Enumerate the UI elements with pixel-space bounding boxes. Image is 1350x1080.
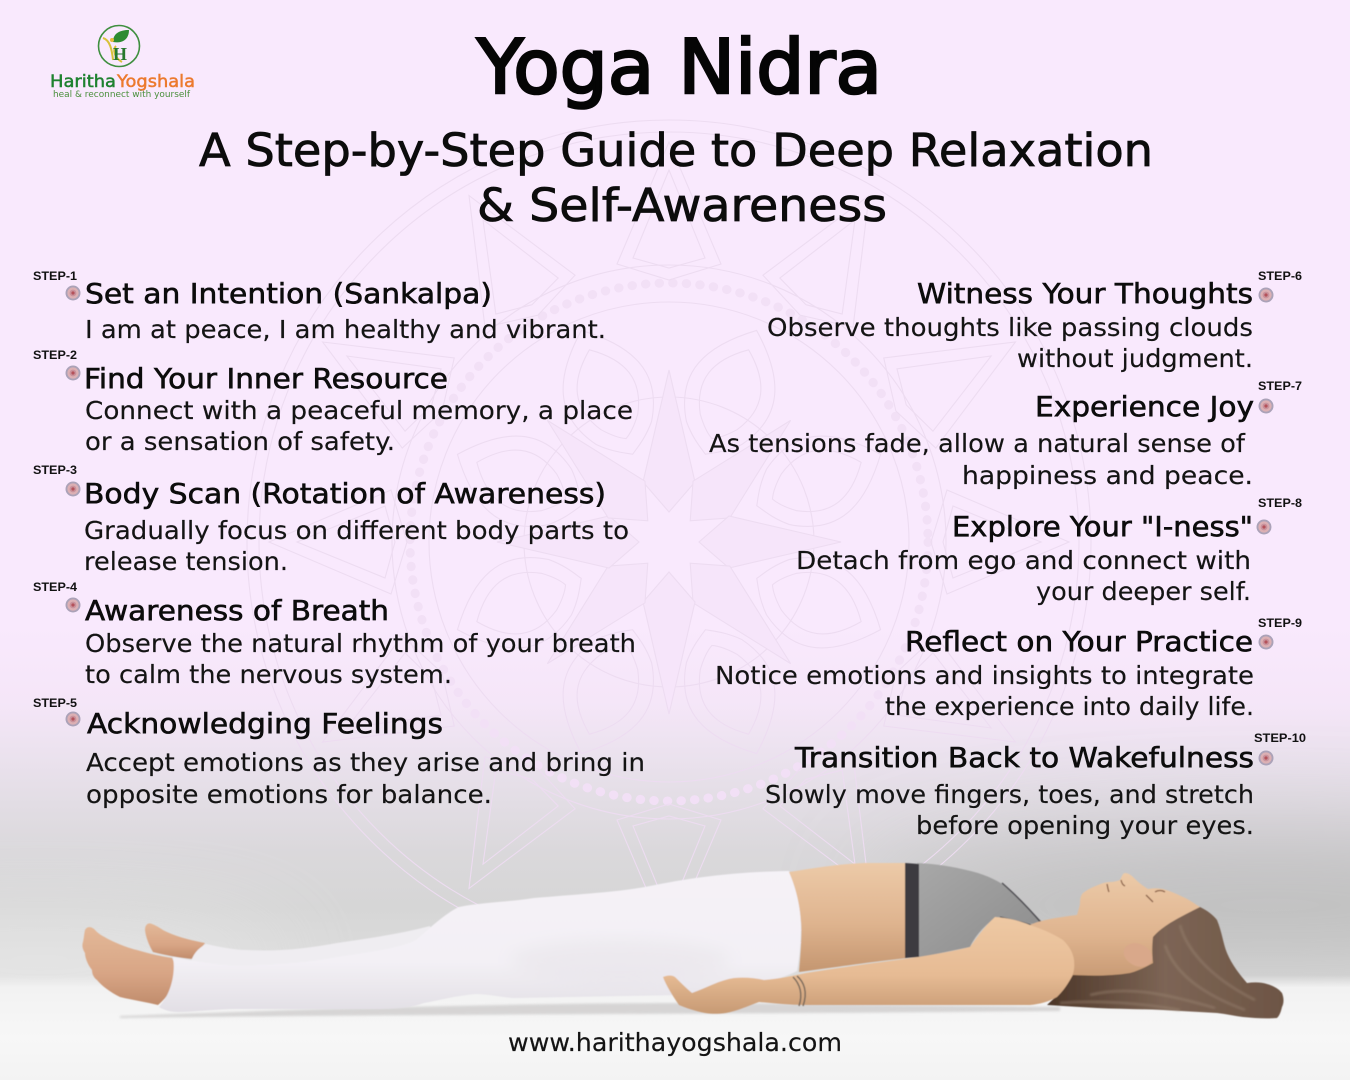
step 3 [33, 463, 629, 576]
step 7: happiness and peace. [962, 461, 1253, 490]
step 5: STEP-5 [33, 696, 77, 710]
torso [789, 863, 907, 972]
step 1: I am at peace, I am healthy and vibrant. [85, 315, 606, 344]
step 8: Explore Your "I-ness" [952, 510, 1253, 543]
step 7: As tensions fade, allow a natural sense of [709, 429, 1246, 458]
subtitle: & Self-Awareness [477, 179, 887, 232]
step 10: Slowly move fingers, toes, and stretch [765, 780, 1254, 809]
logo emblem [98, 26, 140, 66]
step 5 [33, 696, 645, 809]
step 8 [796, 496, 1302, 606]
subtitle: A Step-by-Step Guide to Deep Relaxation [199, 124, 1153, 177]
hair strands [1060, 925, 1255, 1010]
step 5: Acknowledging Feelings [87, 707, 443, 740]
front foot [82, 927, 175, 1005]
step 10: Transition Back to Wakefulness [794, 741, 1254, 774]
step 4: Observe the natural rhythm of your breath [85, 629, 636, 658]
step 7: Experience Joy [1035, 390, 1254, 423]
logo wordmark: Haritha [50, 72, 116, 92]
step 4: STEP-4 [33, 580, 77, 594]
step 1 [33, 269, 606, 344]
step 6: Witness Your Thoughts [917, 277, 1253, 310]
floor shadow [120, 1003, 1060, 1018]
step 5: opposite emotions for balance. [86, 780, 492, 809]
logo [50, 26, 195, 100]
hair [1047, 907, 1284, 1018]
subtitle [199, 124, 1153, 232]
closed eye and brow [1107, 880, 1165, 902]
step 3: release tension. [84, 547, 288, 576]
logo: Yogshala [116, 72, 195, 92]
step 3: Gradually focus on different body parts to [84, 516, 629, 545]
step 7: STEP-7 [1258, 379, 1302, 393]
logo emblem: H [113, 44, 127, 64]
step 2: Find Your Inner Resource [84, 362, 448, 395]
neck and face [1030, 873, 1200, 985]
step 3: Body Scan (Rotation of Awareness) [84, 477, 606, 510]
step 7 [709, 379, 1302, 490]
step 2 [33, 348, 633, 456]
step 9: Reflect on Your Practice [905, 625, 1253, 658]
illustration: woman lying in savasana [82, 863, 1283, 1018]
step 2: STEP-2 [33, 348, 77, 362]
step 4: Awareness of Breath [85, 594, 389, 627]
step 6: STEP-6 [1258, 269, 1302, 283]
step 2: Connect with a peaceful memory, a place [85, 396, 633, 425]
step 8: STEP-8 [1258, 496, 1302, 510]
step 5: Accept emotions as they arise and bring in [86, 748, 645, 777]
legging [159, 871, 801, 1012]
step 9: STEP-9 [1258, 616, 1302, 630]
step 10: STEP-10 [1254, 731, 1306, 745]
top strap [1000, 883, 1043, 927]
grey sports top [917, 863, 1048, 958]
step 3: STEP-3 [33, 463, 77, 477]
step 6: without judgment. [1017, 344, 1253, 373]
logo tagline: heal & reconnect with yourself [53, 90, 191, 100]
website url: www.harithayogshala.com [508, 1028, 842, 1057]
step 10 [765, 731, 1306, 840]
bracelet [793, 976, 805, 1006]
mandala watermark [247, 120, 1091, 964]
step 9 [715, 616, 1302, 721]
step 6: Observe thoughts like passing clouds [767, 313, 1253, 342]
step 1: STEP-1 [33, 269, 77, 283]
step 2: or a sensation of safety. [85, 427, 395, 456]
step 10: before opening your eyes. [916, 811, 1254, 840]
step 9: Notice emotions and insights to integrate [715, 661, 1254, 690]
far foot [145, 923, 205, 959]
step 1: Set an Intention (Sankalpa) [85, 277, 492, 310]
step 8: your deeper self. [1036, 577, 1251, 606]
dark band [905, 863, 919, 958]
arm and hand [663, 917, 1074, 1014]
step 4: to calm the nervous system. [85, 660, 452, 689]
ear [1120, 939, 1156, 971]
title: Yoga Nidra [476, 23, 882, 111]
step 9: the experience into daily life. [885, 692, 1254, 721]
step 8: Detach from ego and connect with [796, 546, 1251, 575]
legging shading [510, 940, 730, 980]
step 4 [33, 580, 636, 689]
step 6 [767, 269, 1302, 373]
far leg [190, 926, 440, 975]
